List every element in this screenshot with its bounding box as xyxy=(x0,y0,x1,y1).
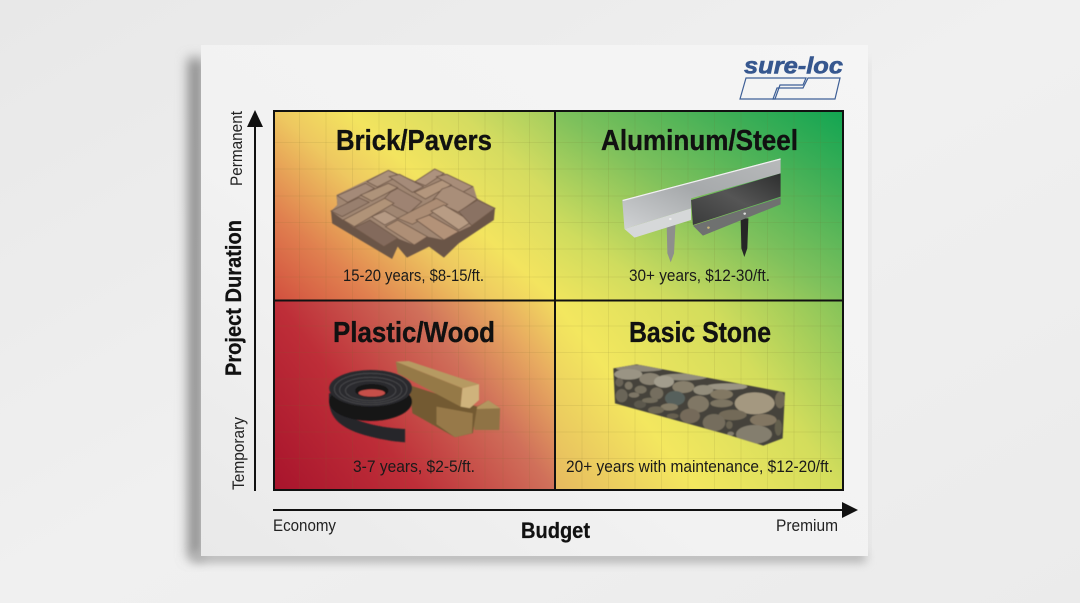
icon: metal edging xyxy=(622,158,781,262)
icon: brick pavers xyxy=(331,169,495,259)
caption: plastic and wood lifespan and price: 3-7 years, $2-5/ft. xyxy=(353,457,475,476)
card shadow xyxy=(188,58,871,562)
panel: white board xyxy=(201,45,868,556)
logo: sure-loc xyxy=(740,52,843,99)
icon: plastic roll and wood posts xyxy=(329,361,500,442)
heading: Brick/Pavers: Brick/Pavers xyxy=(336,125,492,157)
arrow: budget axis xyxy=(273,502,858,518)
axis label: Economy: Economy xyxy=(273,516,336,535)
chart: four quadrant matrix xyxy=(274,111,843,490)
logo: sure-loc: sure-loc xyxy=(744,52,843,78)
quadrant: Plastic/Wood xyxy=(329,317,500,476)
axis title: Budget: Budget xyxy=(521,518,591,543)
axis label: Temporary: Temporary xyxy=(229,417,248,490)
caption: stone lifespan and price: 20+ years with maintenance, $12-20/ft. xyxy=(566,457,833,476)
heading: Basic Stone: Basic Stone xyxy=(629,317,771,349)
quadrant: Basic Stone xyxy=(566,317,833,476)
heading: Aluminum/Steel: Aluminum/Steel xyxy=(601,125,798,157)
quadrant: Brick/Pavers xyxy=(331,125,495,285)
heading: Plastic/Wood: Plastic/Wood xyxy=(333,317,495,349)
axis label: Premium: Premium xyxy=(776,516,838,535)
axis title: Project Duration: Project Duration xyxy=(221,220,246,376)
caption: brick lifespan and price: 15-20 years, $8-15/ft. xyxy=(343,266,484,285)
quadrant: Aluminum/Steel xyxy=(601,125,798,285)
axis label: Permanent: Permanent xyxy=(227,111,246,186)
icon: stacked stone wall xyxy=(613,364,785,446)
arrow: project duration axis xyxy=(247,110,263,491)
caption: metal lifespan and price: 30+ years, $12-30/ft. xyxy=(629,266,770,285)
